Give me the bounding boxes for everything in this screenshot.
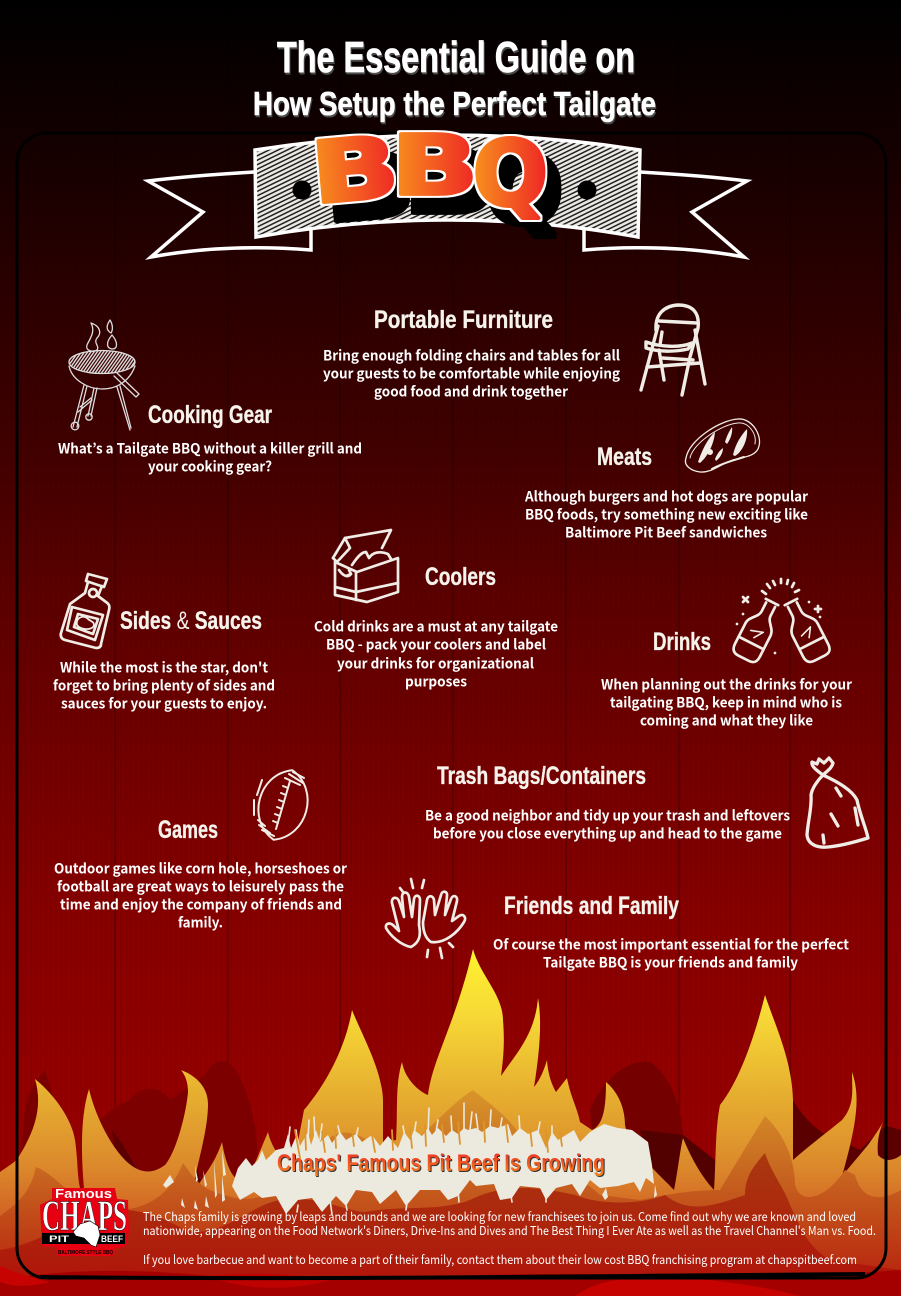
text block: forget to bring plenty of sides and — [53, 676, 275, 696]
text block — [601, 675, 853, 731]
logo: Chaps Pit Beef: Famous — [55, 1186, 112, 1201]
icon: sauce bottle — [61, 574, 109, 648]
text block — [493, 935, 849, 973]
text block: Outdoor games like corn hole, horseshoes or — [54, 859, 348, 879]
icon: football — [251, 764, 315, 846]
icon: folding chair — [641, 305, 705, 395]
text block — [53, 658, 275, 714]
text block: your guests to be comfortable while enjoying — [323, 364, 621, 384]
heading: Trash Bags/Containers — [437, 762, 646, 790]
panel: meats — [524, 419, 809, 543]
flames: bottom red edge — [0, 1266, 901, 1296]
panel: sides and sauces — [53, 574, 275, 714]
text block: sauces for your guests to enjoy. — [61, 694, 267, 714]
text block: good food and drink together — [374, 382, 569, 402]
BBQ lettering: Q — [473, 121, 548, 226]
section heading: growing: Chaps' Famous Pit Beef Is Growing — [277, 1150, 605, 1177]
heading: Games — [158, 816, 218, 844]
text block: before you close everything up and head to the game — [433, 824, 782, 844]
icon: cooler — [333, 530, 398, 602]
logo: Chaps Pit Beef: BALTIMORE STYLE BBQ — [58, 1250, 113, 1256]
text block: BBQ foods, try something new exciting like — [525, 505, 808, 525]
text block: What’s a Tailgate BBQ without a killer grill and — [58, 439, 362, 459]
BBQ lettering: B — [307, 118, 403, 223]
BBQ lettering — [307, 118, 548, 226]
text block: Baltimore Pit Beef sandwiches — [565, 523, 767, 543]
heading: Cooking Gear — [148, 401, 272, 429]
title — [253, 33, 656, 122]
text block: Tailgate BBQ is your friends and family — [543, 953, 798, 973]
logo: Chaps Pit Beef: BEEF — [101, 1234, 123, 1244]
flames: red inner layer — [0, 1153, 901, 1296]
text block: Bring enough folding chairs and tables for all — [323, 346, 621, 366]
flames: mid orange layer — [0, 1090, 901, 1296]
torn paper strip — [163, 1103, 657, 1214]
footer text — [143, 1208, 876, 1268]
heading: Meats — [597, 443, 652, 471]
heading: Coolers — [425, 563, 496, 591]
text block: Cold drinks are a must at any tailgate — [314, 617, 558, 637]
title line 1: The Essential Guide on — [277, 33, 635, 82]
text block: your cooking gear? — [148, 457, 272, 477]
icon: steak — [685, 419, 760, 472]
heading: Friends and Family — [504, 892, 679, 920]
heading: Sides & Sauces — [120, 607, 262, 635]
text block — [425, 806, 790, 844]
text block: When planning out the drinks for your — [601, 675, 853, 695]
text block: family. — [178, 913, 223, 933]
text block: your drinks for organizational — [337, 654, 535, 674]
logo: Chaps Pit Beef: PIT — [49, 1234, 70, 1244]
text block: time and enjoy the company of friends and — [60, 895, 342, 915]
text block — [323, 346, 621, 402]
text block: football are great ways to leisurely pass the — [57, 877, 344, 897]
panel: games — [54, 764, 348, 933]
text block: tailgating BBQ, keep in mind who is — [610, 693, 842, 713]
heading: Drinks — [653, 628, 711, 656]
panel: trash bags — [425, 758, 868, 847]
banner tails — [148, 172, 747, 257]
panel: drinks — [601, 579, 853, 731]
title line 2: How Setup the Perfect Tailgate — [253, 85, 656, 122]
panel: coolers — [314, 530, 558, 692]
icon: clinking bottles — [731, 579, 832, 664]
text block — [314, 617, 558, 692]
banner hatched centre — [255, 135, 640, 237]
panel: cooking gear — [58, 320, 362, 477]
logo: Chaps Pit Beef: CHAPS — [42, 1193, 127, 1240]
flames: dark back layer — [20, 1061, 901, 1195]
icon: high five hands — [386, 879, 465, 958]
banner — [148, 118, 747, 257]
text block: Although burgers and hot dogs are popular — [524, 487, 809, 507]
text block: coming and what they like — [640, 711, 813, 731]
heading: Portable Furniture — [374, 306, 553, 334]
text block: BBQ - pack your coolers and label — [326, 635, 547, 655]
icon: trash bag — [807, 758, 868, 847]
text block — [524, 487, 809, 543]
panel: friends and family — [386, 879, 849, 973]
text block: purposes — [405, 672, 467, 692]
flames: main yellow-orange layer — [0, 949, 901, 1296]
banner dots — [292, 180, 312, 200]
text block: Of course the most important essential for the perfect — [493, 935, 849, 955]
text block: Be a good neighbor and tidy up your trash and leftovers — [425, 806, 790, 826]
icon: grill — [69, 320, 139, 430]
BBQ lettering: B — [391, 119, 478, 214]
panel: portable furniture — [323, 305, 705, 402]
text block — [58, 439, 362, 477]
text block: While the most is the star, don't — [60, 658, 268, 678]
logo: Chaps Pit Beef — [40, 1186, 129, 1256]
text block — [54, 859, 348, 933]
